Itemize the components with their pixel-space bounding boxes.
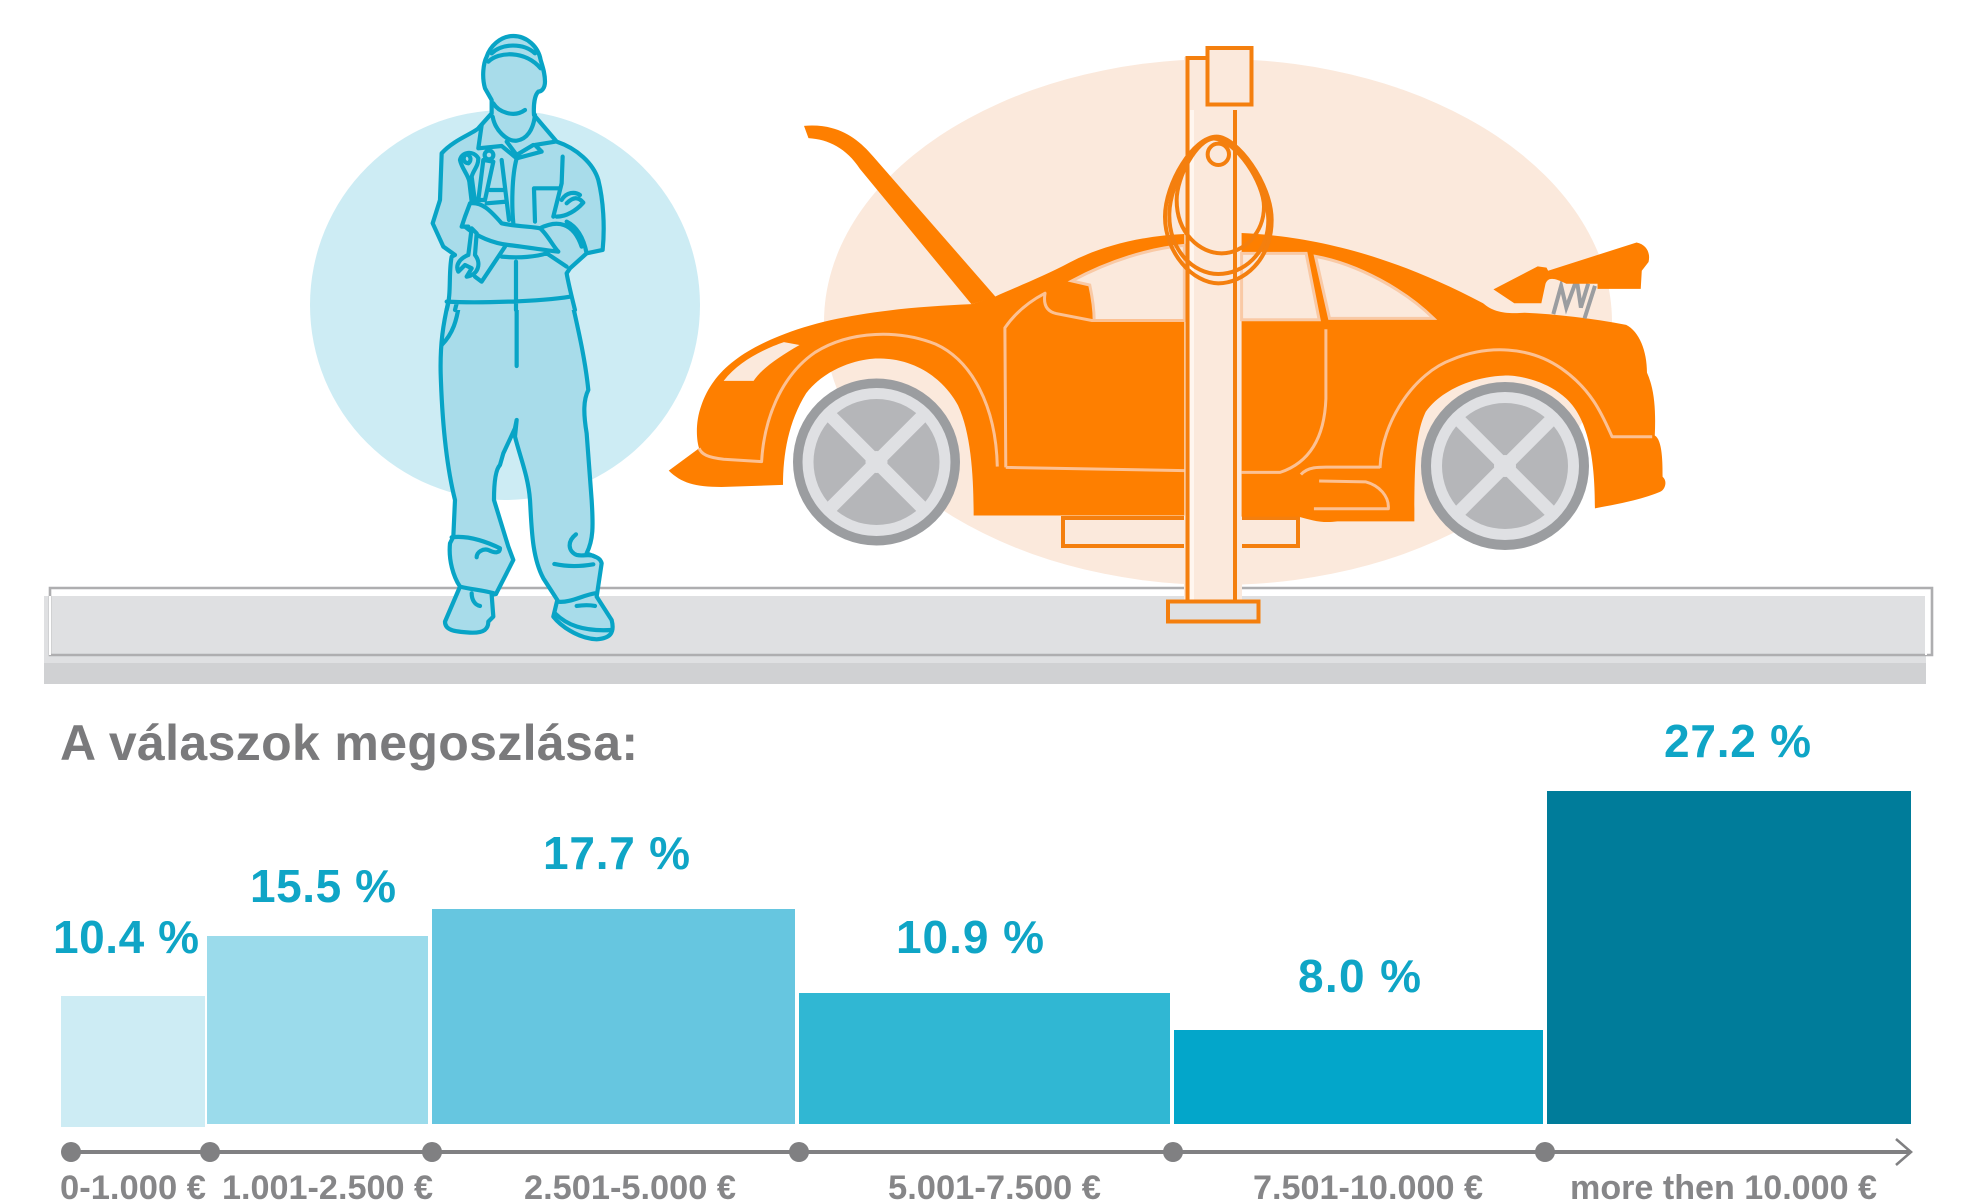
- lift column fill: [1184, 57, 1242, 602]
- rear quarter window: [1315, 256, 1434, 318]
- mechanic torso and head: [433, 36, 604, 310]
- lift top box: [1208, 48, 1252, 104]
- car: front half: [669, 126, 1184, 516]
- front wheel: [793, 378, 960, 546]
- rear wheel: [1421, 382, 1589, 550]
- icon: wrenches: [457, 151, 493, 277]
- lift column lines: [1188, 58, 1235, 601]
- spoiler struts: [1553, 279, 1595, 318]
- background ellipse: car: [824, 59, 1612, 585]
- lift hook and hose: [1165, 137, 1272, 283]
- bar: 1.001-2.500: [207, 936, 428, 1124]
- headlight: [724, 342, 800, 381]
- car panel lines front: [699, 293, 1184, 471]
- car hood: [804, 126, 996, 304]
- car body front: [669, 234, 1184, 516]
- bar: 2.501-5.000: [432, 909, 795, 1124]
- bar: 5.001-7.500: [799, 993, 1170, 1124]
- front side window: [1072, 245, 1184, 320]
- car panel lines rear: [1242, 329, 1652, 509]
- bar: 7.501-10.000: [1174, 1030, 1543, 1124]
- rear spoiler: [1493, 243, 1649, 303]
- axis labels: [60, 1169, 1877, 1200]
- heading: A válaszok megoszlása:: [60, 715, 638, 771]
- background circle: mechanic: [310, 110, 700, 500]
- axis arrow with markers: [61, 1139, 1911, 1165]
- value: 15.5: 15.5 %: [250, 860, 396, 912]
- car: rear half: [1242, 233, 1665, 522]
- mechanic legs: [441, 300, 613, 639]
- ground platform: [44, 588, 1932, 684]
- lift arms: [1063, 518, 1298, 546]
- value: 17.7: 17.7 %: [543, 827, 690, 879]
- lift column highlight: [1190, 110, 1194, 600]
- value: 10.4: 10.4 %: [53, 911, 199, 963]
- car body rear: [1242, 233, 1665, 522]
- lift base: [1168, 602, 1258, 622]
- value: 10.9: 10.9 %: [896, 911, 1044, 963]
- bar chart: [53, 715, 1911, 1127]
- value: 8.0: 8.0 %: [1298, 950, 1421, 1002]
- mechanic figure: [433, 36, 613, 639]
- rear door window: [1242, 253, 1319, 320]
- value: 27.2: 27.2 %: [1664, 715, 1811, 767]
- bar: more then 10.000: [1547, 791, 1911, 1124]
- bar: 0-1.000: [61, 996, 205, 1127]
